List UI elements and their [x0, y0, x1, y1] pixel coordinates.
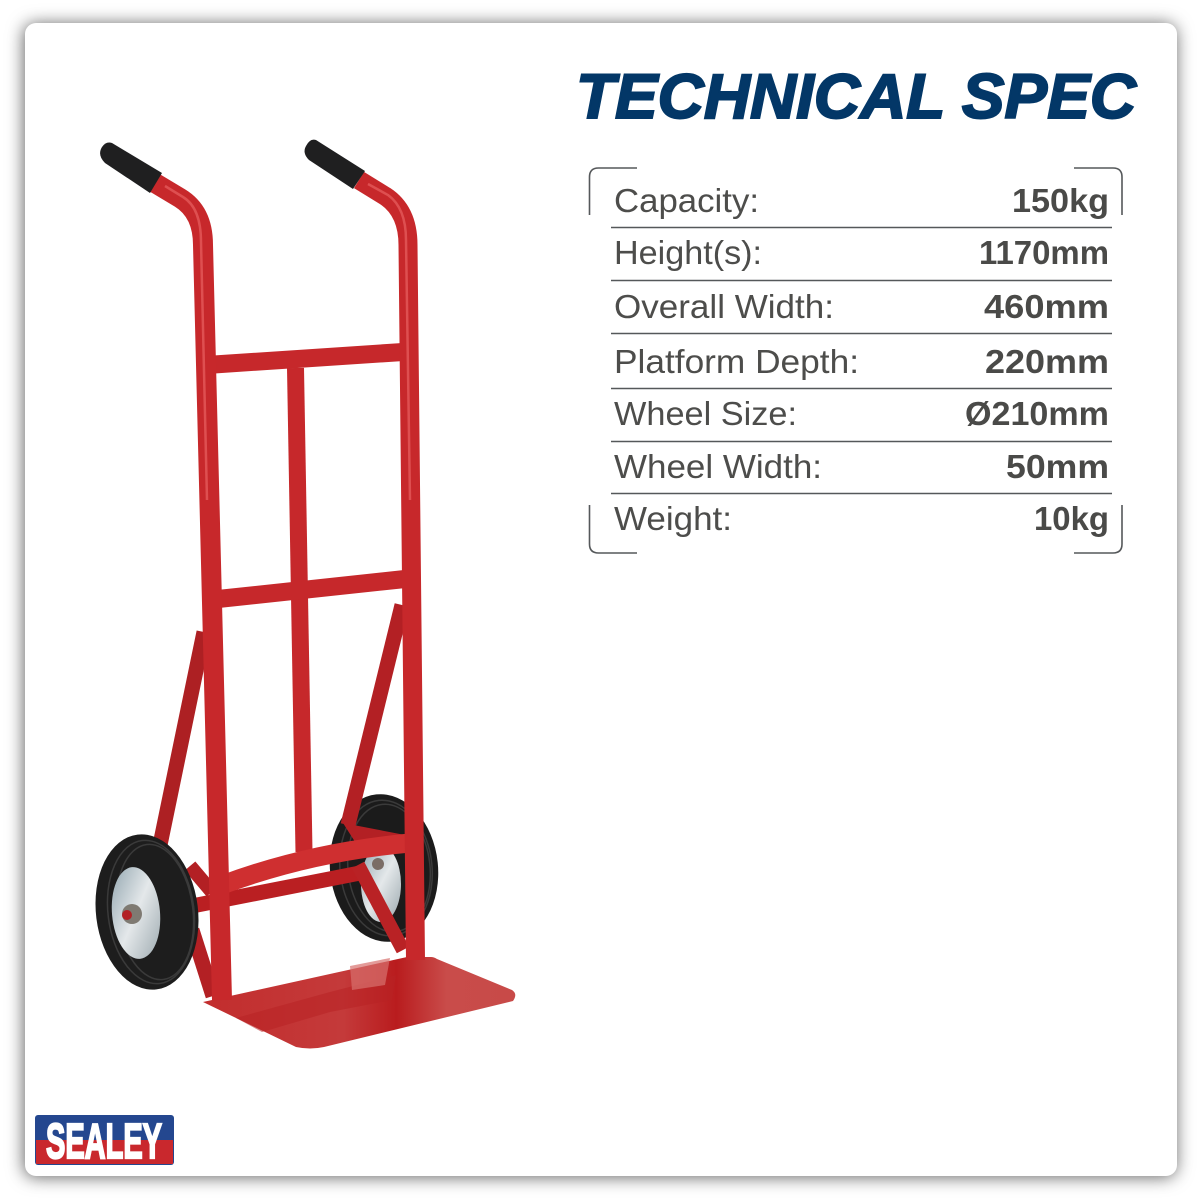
- spec table: [590, 168, 1122, 553]
- row: wheel size: Ø210mm: [965, 395, 1109, 432]
- title: TECHNICAL SPEC: [576, 62, 1138, 132]
- icon: rear wheel: [323, 789, 445, 947]
- row: wheel width: 50mm: [1006, 448, 1109, 485]
- row: height: Height(s):: [614, 234, 762, 271]
- logo: Sealey: SEALEY: [46, 1115, 162, 1169]
- row: capacity: [614, 182, 1109, 219]
- row: wheel width: [614, 448, 1109, 485]
- row: wheel size: Wheel Size:: [614, 395, 797, 432]
- row: platform depth: 220mm: [985, 343, 1109, 380]
- row: capacity: Capacity:: [614, 182, 759, 219]
- left upright tube with handle: [100, 142, 222, 1000]
- logo: Sealey: [35, 1115, 174, 1169]
- row: weight: [614, 500, 1109, 537]
- table corner brackets: [590, 168, 1122, 553]
- row dividers: [611, 228, 1112, 494]
- row: overall width: Overall Width:: [614, 288, 834, 325]
- row: platform depth: [614, 343, 1109, 380]
- row: overall width: [614, 288, 1109, 325]
- row: capacity: 150kg: [1012, 182, 1109, 219]
- row: wheel width: Wheel Width:: [614, 448, 822, 485]
- product illustration: red sack truck: [87, 140, 515, 1049]
- icon: front wheel: [87, 828, 207, 996]
- row: overall width: 460mm: [984, 288, 1109, 325]
- row: weight: Weight:: [614, 500, 732, 537]
- right upright tube with handle: [305, 140, 416, 960]
- cross bars: [214, 352, 410, 885]
- row: platform depth: Platform Depth:: [614, 343, 859, 380]
- row: wheel size: [614, 395, 1109, 432]
- row: height: [614, 234, 1109, 271]
- row: height: 1170mm: [979, 234, 1109, 271]
- row: weight: 10kg: [1034, 500, 1109, 537]
- rear frame struts: [160, 605, 405, 996]
- platform plate: [203, 957, 515, 1048]
